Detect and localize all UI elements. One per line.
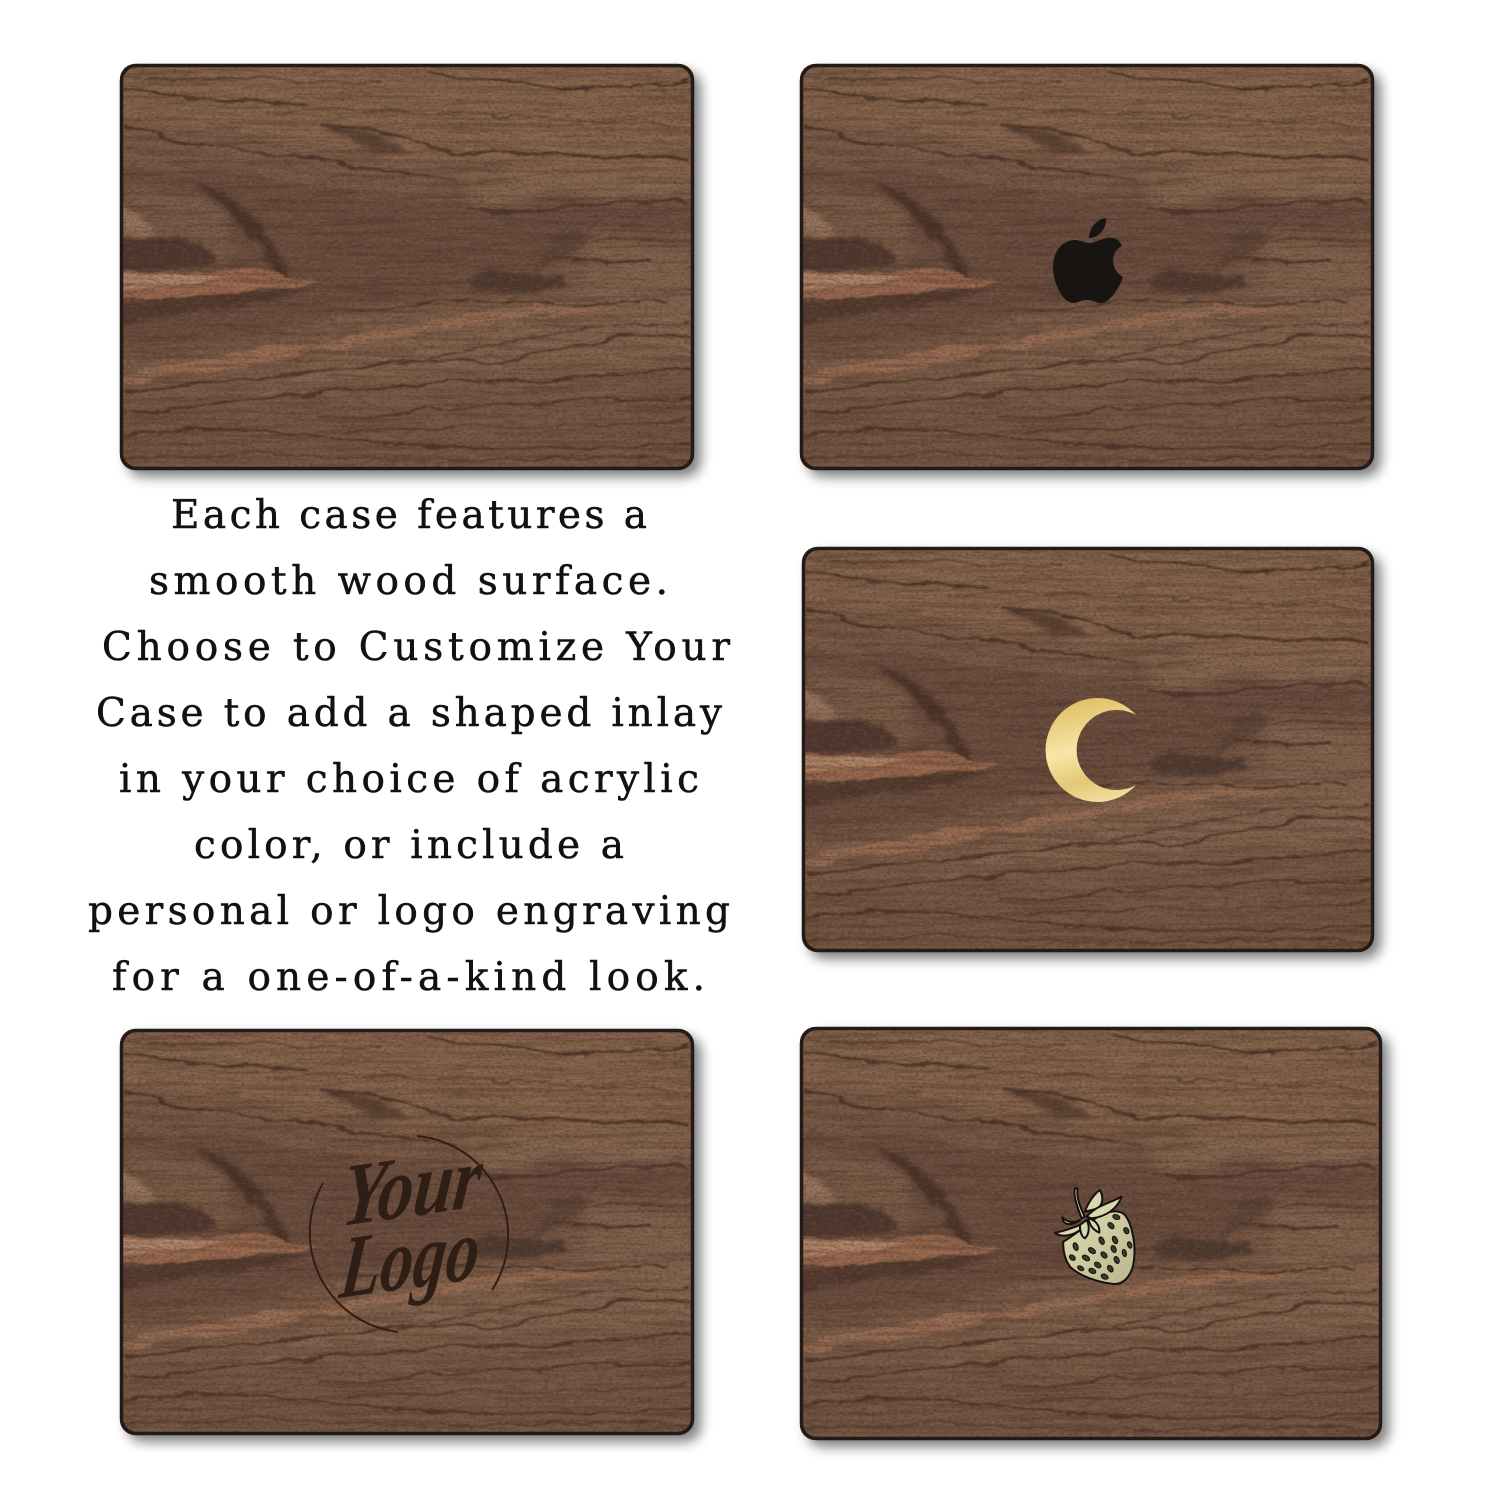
text block: description: color, or include a bbox=[194, 823, 624, 868]
panel: wood case with engraved logo bbox=[90, 999, 740, 1459]
text block: description: Case to add a shaped inlay bbox=[96, 691, 722, 736]
text block: description: personal or logo engraving bbox=[88, 889, 730, 934]
logo engraving: circle and script: Logo bbox=[335, 1199, 485, 1318]
text block: description: for a one-of-a-kind look. bbox=[112, 955, 705, 1000]
text block: description bbox=[88, 493, 730, 1000]
panel: plain wood case bbox=[90, 34, 740, 494]
text block: description: Each case features a bbox=[171, 493, 647, 538]
panel: wood case with strawberry inlay bbox=[770, 996, 1429, 1464]
text block: description: in your choice of acrylic bbox=[119, 757, 699, 802]
logo engraving: circle and script: Your bbox=[338, 1127, 488, 1246]
icon: black apple inlay bbox=[1053, 218, 1123, 303]
icon: gold crescent moon bbox=[1046, 698, 1136, 802]
panel: wood case with gold moon inlay bbox=[772, 517, 1420, 976]
logo engraving: circle and script bbox=[310, 1127, 508, 1332]
icon: strawberry inlay bbox=[1055, 1188, 1134, 1284]
text block: description: Choose to Customize Your bbox=[102, 625, 730, 670]
panel: wood case with apple inlay bbox=[770, 34, 1420, 494]
text block: description: smooth wood surface. bbox=[149, 559, 668, 604]
